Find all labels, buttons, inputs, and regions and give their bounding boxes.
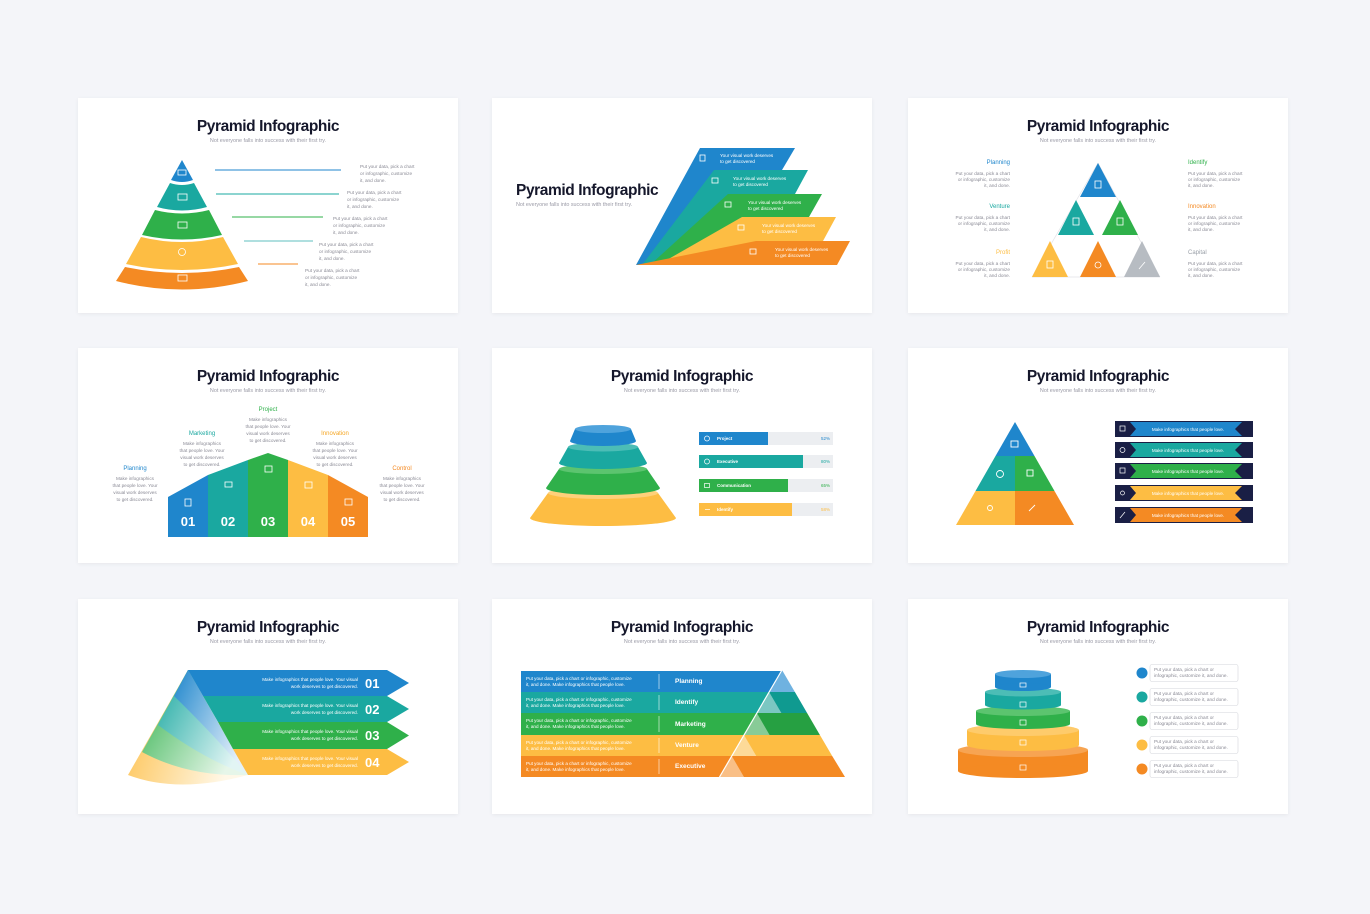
labels: that people love. Your <box>179 448 225 453</box>
labels: to get discovered. <box>183 462 221 467</box>
left labels: it, and done. <box>984 183 1010 188</box>
title: Not everyone falls into success with their first try. <box>1040 138 1156 144</box>
arrows: work deserves to get discovered. <box>291 710 358 715</box>
descriptions: it, and done. <box>347 204 373 209</box>
layered pyramid: to get discovered <box>762 229 797 234</box>
arrows <box>188 670 409 775</box>
left labels: Put your data, pick a chart <box>956 261 1011 266</box>
arrows: Make infographics that people love. Your visual <box>262 703 358 708</box>
arrows: 01 <box>365 676 379 691</box>
rows and pyramid: Marketing <box>675 721 706 728</box>
descriptions: or infographic, customize <box>305 275 358 280</box>
arrows: 03 <box>365 728 379 743</box>
columns: 03 <box>261 514 275 529</box>
layered pyramid: Your visual work deserves <box>762 223 816 228</box>
left labels <box>956 160 1011 278</box>
progress bars: Identify <box>717 507 733 512</box>
pyramid <box>956 422 1074 525</box>
labels: Innovation <box>321 431 349 437</box>
rows and pyramid: Venture <box>675 742 699 749</box>
rows and pyramid: Put your data, pick a chart or infographic, customize <box>526 676 632 681</box>
left labels: Venture <box>989 204 1011 210</box>
title: Not everyone falls into success with their first try. <box>210 639 326 645</box>
left labels: it, and done. <box>984 273 1010 278</box>
arrows: Make infographics that people love. Your visual <box>262 756 358 761</box>
progress bars: 52% <box>821 436 830 441</box>
list: infographic, customize it, and done. <box>1154 721 1228 726</box>
right labels: Identify <box>1188 160 1207 166</box>
list: Put your data, pick a chart or <box>1154 667 1214 672</box>
progress bars <box>699 432 833 516</box>
descriptions: it, and done. <box>333 230 359 235</box>
descriptions <box>305 164 415 287</box>
descriptions: it, and done. <box>305 282 331 287</box>
progress bars: Project <box>717 436 733 441</box>
title <box>611 368 754 394</box>
title: Pyramid Infographic <box>197 118 340 135</box>
slide 5: stacked discs with bars <box>492 348 872 563</box>
title: Not everyone falls into success with their first try. <box>1040 639 1156 645</box>
descriptions: Put your data, pick a chart <box>333 216 388 221</box>
list: infographic, customize it, and done. <box>1154 697 1228 702</box>
descriptions: or infographic, customize <box>319 249 372 254</box>
descriptions: Put your data, pick a chart <box>305 268 360 273</box>
title: Not everyone falls into success with their first try. <box>210 138 326 144</box>
arrows: 04 <box>365 755 380 770</box>
right labels: or infographic, customize <box>1188 221 1241 226</box>
title: Not everyone falls into success with their first try. <box>210 388 326 394</box>
slide 9: stacked cylinders with list <box>908 599 1288 814</box>
progress bars: 58% <box>821 507 830 512</box>
right labels <box>1188 160 1243 278</box>
rows and pyramid: Executive <box>675 763 706 770</box>
title: Pyramid Infographic <box>611 368 754 385</box>
columns: 05 <box>341 514 355 529</box>
columns: 04 <box>301 514 316 529</box>
rows and pyramid: it, and done. Make infographics that people love. <box>526 746 625 751</box>
list: Put your data, pick a chart or <box>1154 715 1214 720</box>
list: Put your data, pick a chart or <box>1154 691 1214 696</box>
labels: to get discovered. <box>249 438 287 443</box>
left labels: Put your data, pick a chart <box>956 215 1011 220</box>
title <box>1027 368 1170 394</box>
descriptions: Put your data, pick a chart <box>319 242 374 247</box>
discs <box>530 425 676 526</box>
triangles <box>1032 163 1160 277</box>
labels: visual work deserves <box>380 490 424 495</box>
descriptions: it, and done. <box>319 256 345 261</box>
progress bars: Communication <box>717 483 751 488</box>
list: Put your data, pick a chart or <box>1154 739 1214 744</box>
layered pyramid: to get discovered <box>733 182 768 187</box>
layered pyramid: to get discovered <box>720 159 755 164</box>
labels: visual work deserves <box>113 490 157 495</box>
slide 6: split pyramid with list <box>908 348 1288 563</box>
left labels: Put your data, pick a chart <box>956 171 1011 176</box>
layered pyramid: to get discovered <box>775 253 810 258</box>
connector lines <box>215 170 341 264</box>
right labels: it, and done. <box>1188 273 1214 278</box>
title: Pyramid Infographic <box>516 182 659 199</box>
right labels: Capital <box>1188 250 1207 256</box>
labels: Project <box>259 407 278 413</box>
rows and pyramid: Put your data, pick a chart or infographic, customize <box>526 740 632 745</box>
title <box>1027 619 1170 645</box>
progress bars: 80% <box>821 459 830 464</box>
arrows: work deserves to get discovered. <box>291 684 358 689</box>
labels: Make infographics <box>183 441 222 446</box>
right labels: or infographic, customize <box>1188 267 1241 272</box>
rows and pyramid: Identify <box>675 699 698 706</box>
list bars: Make infographics that people love. <box>1152 448 1224 453</box>
columns <box>168 453 368 537</box>
right labels: Innovation <box>1188 204 1216 210</box>
left labels: it, and done. <box>984 227 1010 232</box>
labels: Make infographics <box>249 417 288 422</box>
arrows: Make infographics that people love. Your visual <box>262 677 358 682</box>
rows and pyramid: Put your data, pick a chart or infographic, customize <box>526 697 632 702</box>
layered pyramid: Your visual work deserves <box>748 200 802 205</box>
title <box>516 182 659 208</box>
title: Not everyone falls into success with their first try. <box>516 202 632 208</box>
slide 2: layered fan pyramid <box>492 98 872 313</box>
rows and pyramid: it, and done. Make infographics that people love. <box>526 703 625 708</box>
labels: that people love. Your <box>379 483 425 488</box>
rows and pyramid: Put your data, pick a chart or infographic, customize <box>526 761 632 766</box>
title: Not everyone falls into success with their first try. <box>1040 388 1156 394</box>
slide 8: rows into pyramid <box>492 599 872 814</box>
arrows: 02 <box>365 702 379 717</box>
cone <box>128 670 248 784</box>
layered pyramid: Your visual work deserves <box>775 247 829 252</box>
rows and pyramid: Planning <box>675 678 702 685</box>
arrows: Make infographics that people love. Your visual <box>262 729 358 734</box>
labels <box>112 407 425 502</box>
descriptions: Put your data, pick a chart <box>360 164 415 169</box>
slide 3: triangle grid <box>908 98 1288 313</box>
layered pyramid: Your visual work deserves <box>733 176 787 181</box>
right labels: or infographic, customize <box>1188 177 1241 182</box>
right labels: Put your data, pick a chart <box>1188 261 1243 266</box>
labels: visual work deserves <box>313 455 357 460</box>
list: infographic, customize it, and done. <box>1154 745 1228 750</box>
left labels: or infographic, customize <box>958 221 1010 226</box>
title: Not everyone falls into success with their first try. <box>624 639 740 645</box>
layered pyramid: to get discovered <box>748 206 783 211</box>
list: infographic, customize it, and done. <box>1154 673 1228 678</box>
slide 4: house columns <box>78 348 458 563</box>
left labels: or infographic, customize <box>958 177 1010 182</box>
descriptions: Put your data, pick a chart <box>347 190 402 195</box>
rows and pyramid: it, and done. Make infographics that people love. <box>526 682 625 687</box>
title: Pyramid Infographic <box>611 619 754 636</box>
labels: Make infographics <box>383 476 422 481</box>
left labels: Planning <box>987 160 1010 166</box>
labels: Make infographics <box>316 441 355 446</box>
labels: Marketing <box>189 431 215 437</box>
title <box>197 118 340 144</box>
title <box>611 619 754 645</box>
descriptions: or infographic, customize <box>333 223 386 228</box>
title <box>1027 118 1170 144</box>
title: Not everyone falls into success with their first try. <box>624 388 740 394</box>
labels: that people love. Your <box>312 448 358 453</box>
arrows: work deserves to get discovered. <box>291 736 358 741</box>
descriptions: it, and done. <box>360 178 386 183</box>
left labels: or infographic, customize <box>958 267 1010 272</box>
labels: Make infographics <box>116 476 155 481</box>
slide 7: gradient cone with arrows <box>78 599 458 814</box>
slide 1: cone pyramid with lines <box>78 98 458 313</box>
labels: that people love. Your <box>245 424 291 429</box>
left labels: Profit <box>996 250 1010 256</box>
list <box>1136 664 1238 778</box>
rows and pyramid: it, and done. Make infographics that people love. <box>526 724 625 729</box>
labels: to get discovered. <box>383 497 421 502</box>
labels: Control <box>392 466 412 472</box>
list bars: Make infographics that people love. <box>1152 513 1224 518</box>
list bars <box>1115 421 1253 523</box>
columns: 01 <box>181 514 195 529</box>
labels: that people love. Your <box>112 483 158 488</box>
labels: to get discovered. <box>316 462 354 467</box>
progress bars: 65% <box>821 483 830 488</box>
title: Pyramid Infographic <box>197 619 340 636</box>
layered pyramid: Your visual work deserves <box>720 153 774 158</box>
cylinders <box>958 670 1088 778</box>
list bars: Make infographics that people love. <box>1152 427 1224 432</box>
right labels: it, and done. <box>1188 183 1214 188</box>
arrows: work deserves to get discovered. <box>291 763 358 768</box>
labels: Planning <box>123 466 147 472</box>
descriptions: or infographic, customize <box>360 171 413 176</box>
rows and pyramid: Put your data, pick a chart or infographic, customize <box>526 718 632 723</box>
title: Pyramid Infographic <box>1027 619 1170 636</box>
columns: 02 <box>221 514 235 529</box>
title: Pyramid Infographic <box>1027 118 1170 135</box>
labels: to get discovered. <box>116 497 154 502</box>
title <box>197 368 340 394</box>
list: Put your data, pick a chart or <box>1154 763 1214 768</box>
list: infographic, customize it, and done. <box>1154 769 1228 774</box>
title: Pyramid Infographic <box>197 368 340 385</box>
right labels: Put your data, pick a chart <box>1188 215 1243 220</box>
title <box>197 619 340 645</box>
descriptions: or infographic, customize <box>347 197 400 202</box>
labels: visual work deserves <box>180 455 224 460</box>
progress bars: Executive <box>717 459 739 464</box>
rows and pyramid <box>521 670 845 777</box>
list bars: Make infographics that people love. <box>1152 469 1224 474</box>
labels: visual work deserves <box>246 431 290 436</box>
title: Pyramid Infographic <box>1027 368 1170 385</box>
right labels: Put your data, pick a chart <box>1188 171 1243 176</box>
list bars: Make infographics that people love. <box>1152 491 1224 496</box>
layered pyramid <box>636 148 850 265</box>
cone pyramid <box>116 160 248 290</box>
rows and pyramid: it, and done. Make infographics that people love. <box>526 767 625 772</box>
right labels: it, and done. <box>1188 227 1214 232</box>
